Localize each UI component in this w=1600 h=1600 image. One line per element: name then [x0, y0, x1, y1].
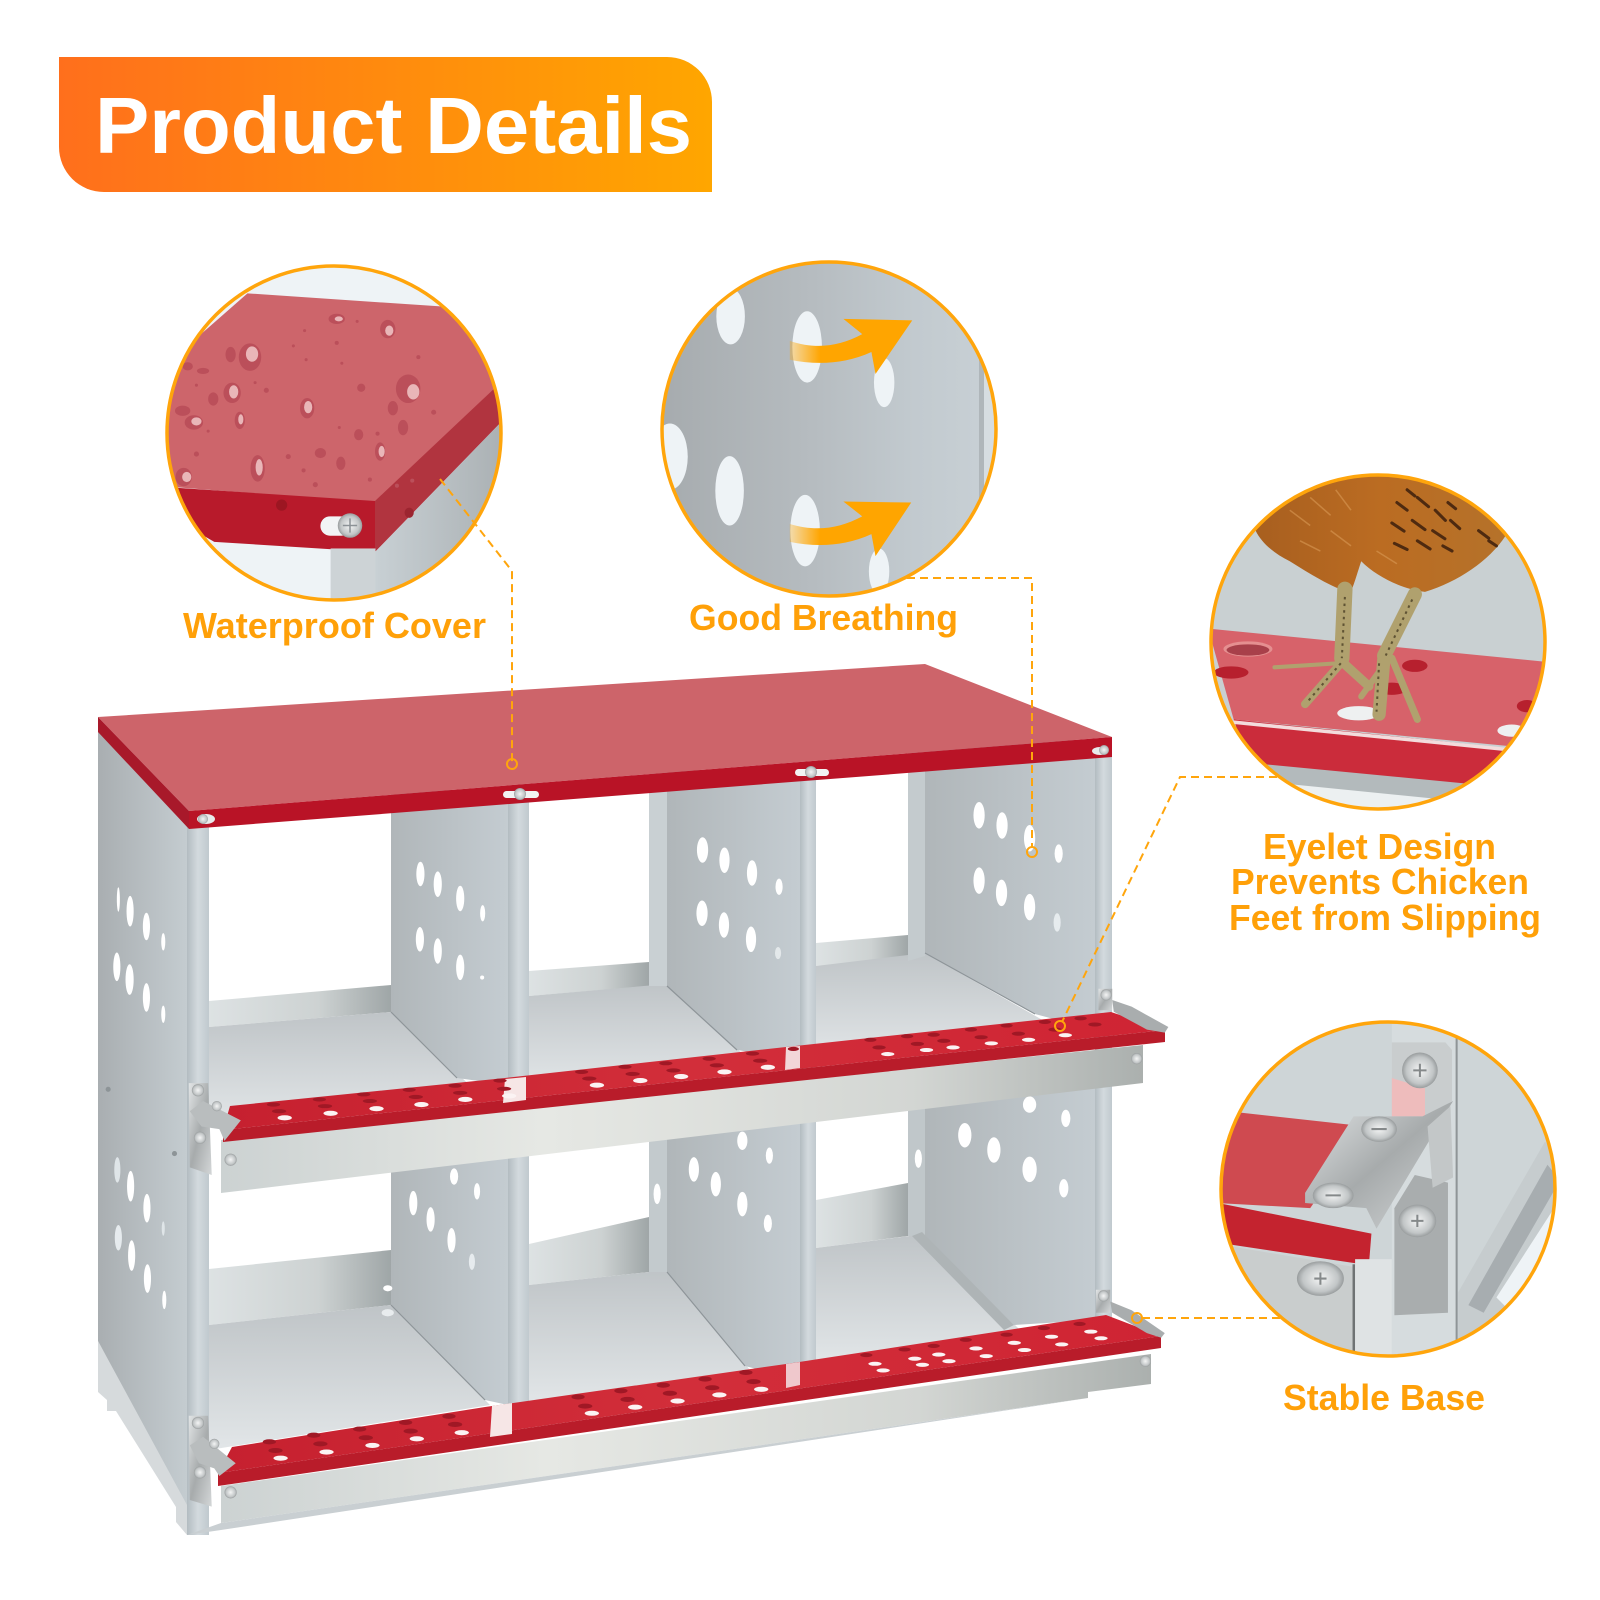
nesting box product	[98, 664, 1168, 1535]
label: eyelet design: Prevents Chicken	[1231, 861, 1529, 902]
label: good breathing: Good Breathing	[689, 597, 958, 638]
ventilation holes lower	[382, 1132, 773, 1316]
callout: waterproof cover	[143, 260, 517, 769]
lower row compartments	[209, 1085, 1095, 1450]
hinges and screws	[189, 989, 1168, 1507]
leader line to roof	[440, 479, 517, 769]
detail circle: chicken feet on perch	[1205, 470, 1550, 816]
label: eyelet design	[1229, 826, 1541, 938]
chicken legs	[1274, 589, 1417, 719]
title: Product Details	[95, 81, 692, 170]
upper row compartments	[209, 740, 1095, 1125]
label: eyelet design: Eyelet Design	[1263, 826, 1496, 867]
leader line to partition	[907, 578, 1037, 857]
detail circle: ventilation holes with airflow arrows	[652, 260, 1000, 600]
airflow arrow bottom	[790, 502, 911, 556]
detail circle: red roof with droplets	[165, 264, 503, 602]
detail circle: hinge bracket	[1215, 1015, 1560, 1361]
label: eyelet design: Feet from Slipping	[1229, 897, 1541, 938]
ventilation holes upper	[416, 837, 783, 980]
leader line to hinge	[1132, 1313, 1282, 1323]
title banner	[59, 57, 712, 192]
airflow arrow top	[790, 319, 912, 374]
callout: eyelet design	[1055, 470, 1550, 1031]
leader line to perch	[1055, 777, 1277, 1031]
label: stable base: Stable Base	[1283, 1377, 1485, 1418]
chicken body	[1256, 474, 1506, 593]
callout: good breathing	[652, 260, 1037, 857]
lower support strip	[221, 1354, 1151, 1523]
upper support strip	[221, 1045, 1143, 1193]
left side panel	[98, 725, 187, 1535]
label: waterproof cover: Waterproof Cover	[183, 605, 486, 646]
callout: stable base	[1132, 1015, 1560, 1418]
roof	[98, 664, 1112, 829]
base underside	[187, 1398, 1088, 1535]
lower perch tray	[218, 1315, 1161, 1486]
upper perch tray	[223, 1012, 1165, 1142]
front posts	[187, 750, 1112, 1535]
